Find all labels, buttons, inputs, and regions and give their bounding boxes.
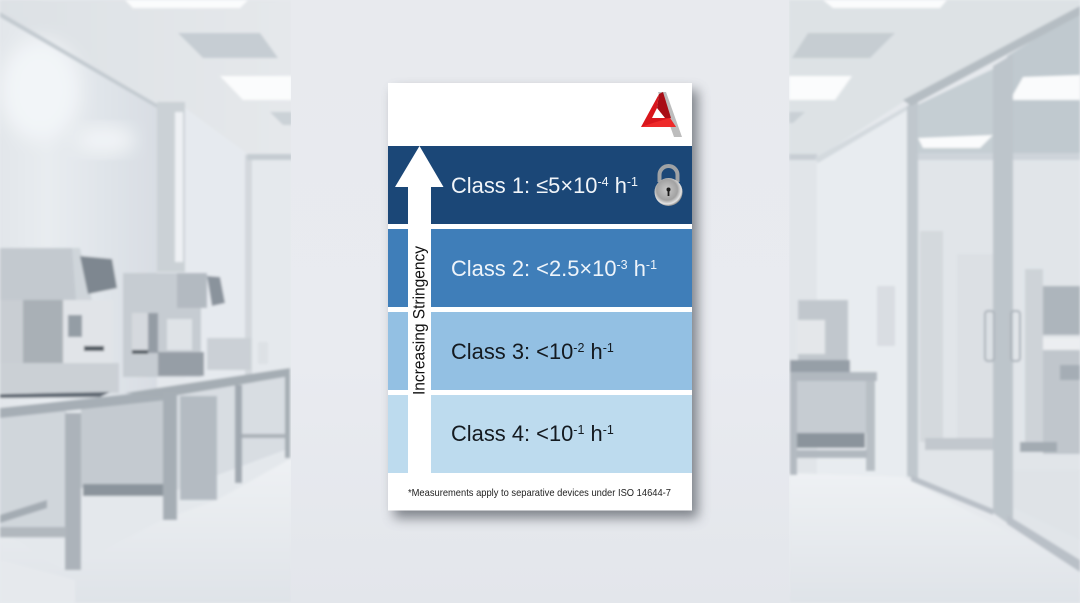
class 1 band <box>388 146 692 224</box>
text: class 2: -3 <box>617 258 628 272</box>
back and side wall <box>789 158 819 478</box>
door frames <box>907 100 918 480</box>
benches <box>0 390 167 418</box>
class 3 band <box>388 312 692 390</box>
footnote: *Measurements apply to separative devices under ISO 14644-7 <box>408 487 671 499</box>
text: class 3: h <box>584 339 603 364</box>
text: class 4: Class 4: <10 <box>451 421 573 446</box>
text: class 1: -4 <box>597 175 609 189</box>
arrow: increasing stringency <box>395 146 444 473</box>
arrow label: Increasing Stringency <box>410 245 428 395</box>
glass door 2 <box>1007 12 1080 569</box>
instrument 1 <box>0 248 80 303</box>
text: class 1: Class 1: ≤5×10 <box>451 173 597 198</box>
background: blurred cleanroom scene right <box>789 0 1080 603</box>
text: class 2: -1 <box>646 258 657 272</box>
background: central wall <box>291 0 789 603</box>
instrument 2 <box>123 273 201 377</box>
text: class 1: -1 <box>627 175 638 189</box>
glass door 1 <box>913 69 993 511</box>
bench right <box>798 300 848 360</box>
text: class 2: Class 2: <2.5×10 <box>451 256 617 281</box>
text: class 3: -2 <box>573 341 584 355</box>
class 2 band <box>388 229 692 307</box>
under bench walls <box>0 408 66 538</box>
card drop shadow <box>394 90 698 518</box>
floor <box>0 458 292 603</box>
text: class 4: -1 <box>603 423 614 437</box>
text: class 2: h <box>628 256 646 281</box>
text: class 1: h <box>609 173 627 198</box>
text: class 3: -1 <box>603 341 614 355</box>
icon: logo <box>641 92 682 137</box>
panel: classes card <box>388 83 692 510</box>
notice on wall <box>877 286 895 346</box>
icon: padlock <box>654 166 682 206</box>
background: blurred cleanroom scene left <box>0 0 292 603</box>
class 4 band <box>388 395 692 473</box>
text: class 3: Class 3: <10 <box>451 339 573 364</box>
text: class 4: h <box>584 421 603 446</box>
floor <box>789 473 1080 603</box>
text: class 4: -1 <box>573 423 584 437</box>
